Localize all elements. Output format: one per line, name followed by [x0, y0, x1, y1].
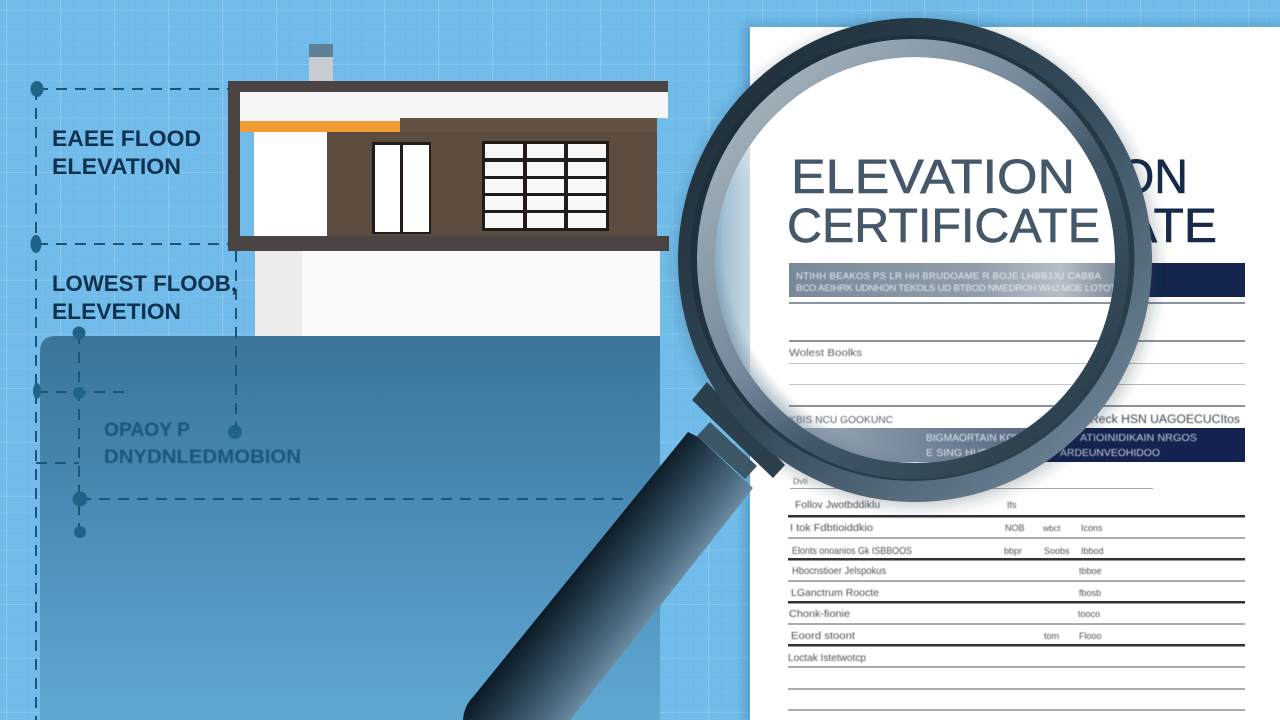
tall window [372, 142, 431, 234]
navy section band [789, 428, 1245, 462]
form table text [788, 476, 1104, 664]
icon: chimney [309, 44, 333, 81]
label: base flood elevation: ELEVATION [52, 154, 181, 179]
form table text: LGanctrum Roocte [791, 587, 879, 599]
form table rules [788, 488, 1245, 711]
form table text: Flooo [1079, 631, 1102, 641]
form table text: Ibbod [1081, 546, 1104, 556]
form table text: tooco [1078, 609, 1100, 619]
form rules upper [789, 302, 1245, 407]
navy section band: ARDEUNVEOHIDOO [1060, 447, 1160, 459]
label: lowest floor elevation: LOWEST FLOOB, [52, 271, 237, 296]
roof and wall frame [228, 81, 669, 251]
form table text: tom [1044, 631, 1059, 641]
certificate title remainder: ON [1118, 151, 1188, 204]
label: base flood elevation: EAEE FLOOD [52, 126, 201, 151]
certificate title remainder: ATE [1124, 200, 1217, 253]
label: base flood elevation [52, 126, 201, 179]
magnified section band: E SING HUBJI [926, 447, 996, 459]
label: lowest floor elevation [52, 271, 237, 324]
magnified section band: BIGMAORTAIN KOV [926, 432, 1021, 444]
form table text: Hbocnstioer Jelspokus [792, 565, 886, 577]
form table text: NOB [1005, 523, 1025, 533]
form table text: Dvti [793, 476, 808, 486]
form table text: Eoord stoont [791, 630, 855, 642]
magnified field labels: KBIS NCU GOOKUNC [789, 415, 893, 426]
form table text: bbpr [1004, 546, 1022, 556]
wide window [482, 141, 609, 231]
label: submerged elevation: OPAOY P [104, 420, 190, 441]
label: submerged elevation [104, 420, 301, 468]
form table text: Icons [1081, 523, 1103, 533]
magnified title [789, 159, 1098, 243]
dimension markers [30, 81, 242, 538]
form field label right: Reck HSN UAGOECUCItos [1090, 414, 1240, 426]
house lower storey [255, 250, 660, 336]
form table text: I tok Fdbtioiddkio [790, 522, 873, 534]
lens glass with magnified certificate [710, 57, 1129, 463]
form table text: Elonts onoanios Gk ISBBOOS [792, 545, 912, 557]
magnified rules [789, 302, 1129, 407]
lens edge shading [715, 232, 930, 463]
icon: handle [463, 382, 785, 720]
silver header band [789, 263, 1129, 297]
label: submerged elevation: DNYDNLEDMOBION [104, 447, 301, 468]
silver header band: NTIHH BEAKOS PS LR HH BRUDOAME R BOJE LHBBJJU CABBA [796, 271, 1102, 282]
navy header band [1060, 263, 1245, 297]
magnified field labels [789, 348, 893, 426]
form table text: Loctak Istetwotcp [788, 652, 866, 664]
certificate title remainder [1118, 151, 1217, 253]
form table text: Ifs [1007, 500, 1017, 510]
floodwater panel [40, 336, 660, 720]
lens soft shadow [677, 19, 1157, 507]
house upper storey [240, 92, 668, 236]
form table text: Chonk-fionie [789, 608, 850, 620]
magnifying glass [463, 18, 1157, 720]
elevation dimension lines [36, 89, 625, 720]
lens ring [678, 18, 1152, 502]
magnified field labels: Wolest Boolks [789, 348, 862, 359]
form table text: Soobs [1044, 546, 1070, 556]
form table text: wbct [1042, 523, 1061, 533]
lens view of paper edge [715, 146, 750, 374]
navy section band: ATIOINIDIKAIN NRGOS [1080, 432, 1197, 444]
label: lowest floor elevation: ELEVETION [52, 299, 181, 324]
form table text: tbboe [1079, 566, 1102, 576]
silver header band: BCO AEIHRK UDNHON TEKOLS UD BTBOD NMEDROH WHJ MOE LOTOT [796, 283, 1116, 294]
magnified title: CERTIFICATE [787, 200, 1100, 253]
magnified title: ELEVATION [791, 151, 1075, 204]
form table text: Follov Jwotbddiklu [795, 499, 880, 511]
house illustration [228, 44, 669, 336]
magnified section band [803, 428, 1027, 462]
form table text: fbosb [1079, 588, 1101, 598]
certificate document [744, 24, 1280, 720]
